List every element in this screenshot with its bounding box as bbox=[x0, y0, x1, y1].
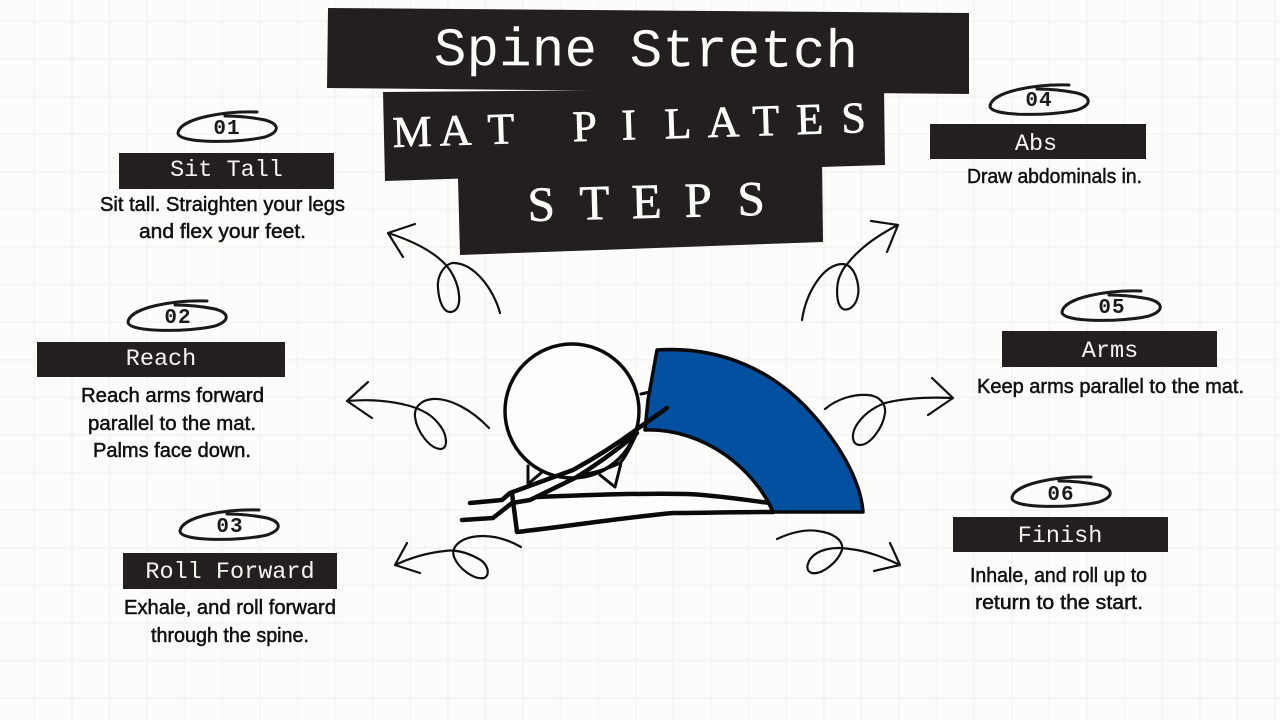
lower back curve bbox=[578, 433, 637, 475]
step 03 bbox=[123, 510, 337, 647]
title block: MAT PILATES bbox=[392, 93, 867, 157]
step 04: Abs bbox=[1015, 131, 1057, 158]
step 06: return to the start. bbox=[975, 592, 1143, 614]
step 06: Inhale, and roll up to bbox=[970, 565, 1147, 587]
title block: STEPS bbox=[527, 171, 765, 232]
step 05: Keep arms parallel to the mat. bbox=[977, 376, 1244, 398]
step 02: Reach bbox=[126, 346, 196, 373]
head bbox=[505, 344, 639, 478]
step 05: Arms bbox=[1082, 338, 1138, 365]
arrow: to step 05 bbox=[825, 378, 953, 445]
step 04: Draw abdominals in. bbox=[967, 166, 1142, 188]
step 01: 01 bbox=[213, 118, 241, 141]
step 02: 02 bbox=[164, 307, 192, 330]
arrow: to step 03 bbox=[395, 536, 521, 578]
step 01: Sit tall. Straighten your legs bbox=[100, 194, 345, 216]
step 06: Finish bbox=[1018, 523, 1102, 550]
neck and hand details bbox=[528, 392, 650, 487]
step 05 bbox=[977, 291, 1244, 398]
step 02: Reach arms forward bbox=[81, 385, 264, 407]
blue back highlight bbox=[645, 350, 863, 512]
arrow: to step 01 bbox=[388, 224, 500, 313]
step 04: 04 bbox=[1025, 90, 1053, 113]
arrow: to step 04 bbox=[802, 221, 898, 320]
arms bbox=[462, 408, 667, 520]
arrow: to step 06 bbox=[777, 530, 900, 573]
title block: Spine Stretch bbox=[434, 21, 858, 84]
step 01: Sit Tall bbox=[170, 157, 283, 184]
step 03: 03 bbox=[216, 516, 244, 539]
figure: spine stretch pose bbox=[462, 344, 863, 532]
step 05: 05 bbox=[1098, 297, 1126, 320]
legs bbox=[512, 493, 773, 532]
arrow: to step 02 bbox=[347, 382, 489, 449]
step 06: 06 bbox=[1047, 484, 1075, 507]
step 02: parallel to the mat. bbox=[88, 413, 256, 435]
step 03: Exhale, and roll forward bbox=[124, 597, 336, 619]
step 01 bbox=[100, 112, 345, 243]
step 04 bbox=[930, 85, 1146, 188]
step 02 bbox=[37, 301, 285, 462]
step 03: through the spine. bbox=[151, 625, 309, 647]
step 03: Roll Forward bbox=[145, 559, 315, 586]
title block bbox=[327, 8, 969, 255]
step 06 bbox=[953, 477, 1168, 614]
step 01: and flex your feet. bbox=[139, 221, 306, 243]
step 02: Palms face down. bbox=[93, 440, 251, 462]
